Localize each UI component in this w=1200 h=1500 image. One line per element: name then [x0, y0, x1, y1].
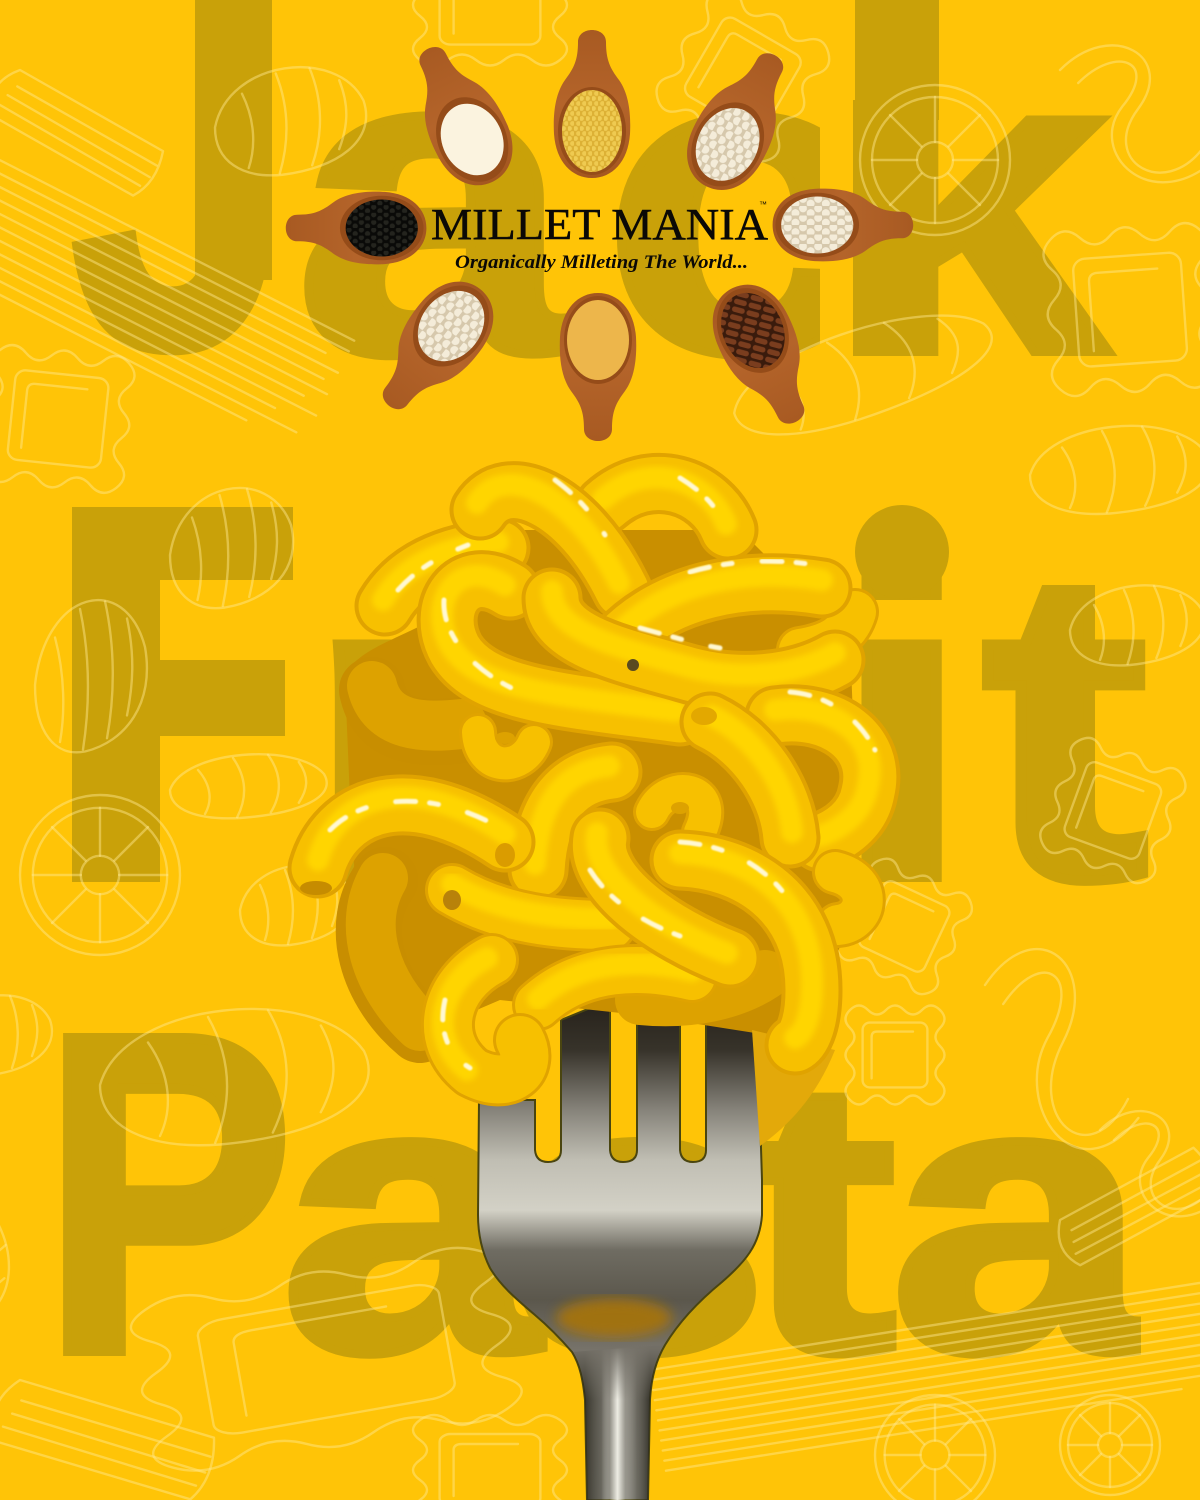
horizontal tube: [443, 884, 610, 925]
lower right small tube: [835, 872, 863, 925]
spoon: pearl millet left bottom: [359, 265, 510, 429]
fork: [478, 1000, 762, 1500]
upper left tube: [383, 542, 500, 606]
heading word: Fruit: [51, 400, 1149, 990]
top back tube: [603, 477, 728, 530]
main diagonal tube: [590, 833, 730, 958]
spoon: pearl millet right top: [672, 37, 809, 204]
spoon: golden flour: [560, 293, 636, 441]
logo wordmark: [431, 200, 768, 273]
big right tube: [680, 842, 812, 1045]
heading word: Pasta: asta: [280, 999, 1152, 1434]
centre tube: [535, 766, 612, 870]
spoon: pearl millet right: [773, 189, 913, 261]
pile shadow mass: [345, 530, 860, 1040]
fork handle shine: [572, 1345, 665, 1500]
logo wordmark: ™: [759, 200, 767, 209]
short right tube: [691, 707, 792, 838]
heading word: Pasta: P: [42, 939, 294, 1448]
big C tube: [442, 576, 680, 716]
back bottom tube: [640, 975, 765, 1001]
right arc tube: [775, 692, 875, 842]
small loop tube: [478, 732, 534, 763]
fork body: [478, 1000, 762, 1500]
logo wordmark: MILLET MANIA: [431, 200, 768, 249]
upper right end tube: [800, 612, 855, 650]
heading word: Fruit: F: [51, 400, 296, 990]
fork bowl reflection: [556, 1298, 672, 1338]
big left arc tube: [300, 797, 515, 895]
peppercorn speck: [627, 659, 639, 671]
top arch tube: [477, 480, 622, 590]
spoon: white millet flour: [394, 32, 527, 198]
spoon: brown rice: [698, 272, 830, 438]
small centre loop: [652, 791, 705, 832]
front hook tube: [443, 958, 524, 1079]
logo wordmark: Organically Milleting The World...: [455, 252, 748, 273]
spoon: black millet: [286, 192, 426, 264]
macaroni pile: [300, 477, 875, 1146]
left vertical dark tube: [369, 878, 420, 1030]
heading word: Fruit: ruit: [306, 479, 1149, 970]
logo group: millet spoons: [286, 30, 913, 441]
right top tube: [618, 561, 822, 642]
S tube: [552, 591, 835, 681]
left dark tube: [372, 686, 462, 732]
heading word: Pasta: [42, 939, 1181, 1448]
under tube: [538, 964, 692, 1005]
spoon: yellow millet: [554, 30, 630, 178]
lower right shaded piece: [752, 1030, 835, 1146]
